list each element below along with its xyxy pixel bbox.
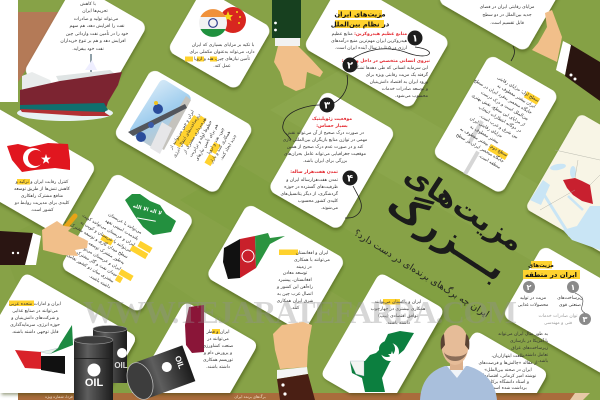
text: regional items: زیرساخت‌های عراق: [511, 346, 548, 351]
text: author credit: و استاد دانشگاه برکلی: [487, 378, 529, 385]
image: portrait of author: [420, 325, 497, 400]
text: pipeline card: جدید ایجاد کنند.: [218, 133, 238, 162]
text: Afghanistan: راه‌آهن این کشور و: [276, 284, 313, 290]
text: hydrocarbon: منابع عظیم هیدروکربن: منابع عظیم: [332, 31, 407, 37]
text: hydrocarbon: [331, 31, 408, 51]
text: Pakistan: ایران و پاکستان می‌توانند: [375, 299, 421, 305]
icon: oil barrel front: OIL: [85, 377, 103, 389]
map: Afghanistan flag: [223, 233, 285, 279]
text: geopolitics: مهمی در توازن منابع بازیگران بین‌المللی بازی: [283, 136, 368, 143]
text: geopolitics: بسیار حساس:: [316, 124, 348, 129]
text: civilisation: [280, 170, 339, 211]
icon: top right hand with sleeve: [532, 10, 600, 101]
text: Afghanistan: کنند.: [291, 305, 300, 311]
text: ship card: تحریم‌ها ایران: [82, 9, 109, 14]
text: human capital: نیروی انسانی متخصص در داخل و خارج:: [342, 59, 430, 64]
map: Saudi Arabia: [125, 194, 176, 235]
text: India China card: تأمین نیازهای چین، هند و اروپا: [194, 55, 251, 62]
text: two level advantages: [441, 66, 540, 175]
image: oil tanker: [17, 54, 122, 121]
icon: oil barrel back: [93, 326, 128, 383]
text: India China card: [185, 42, 255, 69]
text: Turkey: کلیدی برای مدیریت روابط دو: [14, 200, 70, 206]
text: intro: جدید بین‌الملل در دو سطح: [482, 13, 532, 18]
text: intro: مزایای رقابتی ایران در فضای: [480, 5, 535, 10]
text: Afghanistan: می‌توانند با همکاری: [294, 257, 331, 263]
text: geopolitics: بزرگی برای ایران باشد.: [303, 157, 347, 164]
text: Saudi: داشته باشند.: [88, 274, 111, 290]
text: two level advantages: بیشتر معطوف به: [469, 125, 499, 145]
marker: gray number 1: ۱: [571, 283, 575, 292]
text: Qatar: توریسم همکاری: [203, 357, 234, 363]
text: two level advantages: سطح دوم: بیشتر معطوف به: [459, 127, 508, 158]
text: hydrocarbon: ارزی در ۵ تا ۱۰ سال آینده ایران است.: [335, 45, 407, 51]
bottom brown strip: برگ‌های برنده ایران: [234, 394, 266, 399]
panel: Turkey card: [0, 98, 97, 235]
text: ship card: [60, 1, 128, 52]
text: human capital: گرفته یک مزیت رقابتی ویژه برای: [366, 71, 429, 78]
text: Qatar: می‌توانند در: [206, 337, 229, 342]
text: Qatar: ایران و قطر: [206, 330, 229, 335]
text: two level advantages: از مزایای این سطح، نقش بهتری: [471, 93, 526, 128]
text: human capital: [342, 59, 430, 99]
text: UAE: و شرکت‌های دانش‌بنیان و: [10, 315, 59, 321]
text: hydrocarbon: هیدروکربن ایران مهم‌ترین منبع درآمدهای: [331, 38, 408, 44]
text: regional items: مزیت در تولید: [520, 296, 547, 301]
text: Qatar: [203, 329, 234, 370]
icon: top centre hand with green sleeve: [272, 0, 323, 91]
text: Saudi: [46, 196, 153, 291]
panel: Qatar card: [132, 304, 256, 393]
text: Saudi: میدان نفت و گاز مشترک: [75, 249, 120, 278]
text: UAE: قابل توجهی داشته باشند.: [12, 330, 58, 335]
text: author credit: از مقاله «چالش‌ها و فرصت‌های: [478, 361, 538, 366]
text: ship card: نفت خود بیفزاید.: [72, 47, 104, 52]
panel: Pakistan card: [323, 275, 442, 393]
text: Saudi: می‌توانند با عربستان: [107, 212, 143, 236]
text: Turkey: [14, 179, 71, 213]
panel: pipeline card: [113, 68, 254, 195]
panel: two level advantages card: [432, 54, 559, 194]
text: pipeline card: خطوط لوله و ترانزیت: [189, 120, 214, 158]
text: regional items: به طور مثال ایران می‌تواند: [498, 332, 548, 337]
text: author credit: نوشته امیر کرمانی، اقتصاددان: [480, 373, 536, 379]
panel: top right intro card: [437, 0, 565, 52]
text: two level advantages: ایران بیشتر معطوف به: [496, 84, 536, 110]
icon: oil barrel lying: OIL: [173, 355, 186, 370]
text: UAE: می‌توانند در صنایع غذایی: [12, 309, 58, 314]
text: author credit: [478, 354, 538, 391]
marker: number 2: ۲: [347, 60, 353, 72]
text: two level advantages: منطقه است.: [477, 154, 502, 171]
marker: gray number 2: [523, 281, 535, 293]
text: India China card: با تکیه بر مزایای بسیاری که ایران: [192, 42, 254, 48]
text: human capital: محسوب می‌شود.: [395, 94, 429, 99]
text: Saudi: سطح میدان گازی و توسعه مشترک آن: [64, 218, 130, 260]
text: pipeline card: ایران و چین می‌توانند از: [169, 110, 196, 151]
image: pipeline workers: [128, 78, 193, 154]
text: two level advantages: مزایای رقابتی ایران: [469, 116, 503, 139]
heading: regional: مزیت‌های: [528, 263, 554, 269]
text: pipeline card: همکاری کنند و بازار: [208, 129, 232, 165]
text: ship card: با کاهش: [80, 1, 96, 7]
marker: gray number 3: ۳: [583, 315, 588, 324]
map: Qatar flag: [185, 305, 204, 353]
text: human capital: و توسعه صادرات خدمات: [382, 87, 428, 92]
text: two level advantages: بین شرق و غرب است.: [478, 114, 518, 140]
map: Iran region: [530, 150, 600, 250]
connector line behind cards: [511, 46, 514, 61]
text: author credit: ظلعت ایتهازاریان،: [491, 354, 525, 359]
text: Afghanistan: اتصال غرب چین به: [277, 292, 313, 297]
marker: number 3: [320, 98, 334, 112]
text: UAE: [9, 300, 61, 335]
marker: gray number 1: [567, 281, 579, 293]
text: intro: [480, 5, 535, 26]
heading: regional: ایران در منطقه: [525, 271, 577, 279]
text: geopolitics: موقعیت جغرافیایی می‌تواند عامل بحران‌های: [284, 152, 367, 157]
text: Saudi: می‌توانند با عربستان و کویت به: [79, 220, 133, 254]
text: civilisation: ظرفیت‌های گسترده در حوزه: [284, 183, 338, 190]
title: بـــزرگ: [380, 180, 516, 290]
marker: number 1: ۱: [412, 34, 418, 44]
panel: international heading card: [303, 0, 450, 109]
map: Turkey flag: [7, 143, 70, 172]
text: Pakistan: [371, 299, 426, 326]
text: Saudi: ایران و عربستان می‌توانند در توسعه: [61, 234, 122, 272]
panel: India China flags card: [167, 0, 272, 90]
text: regional items: زیرساخت‌های: [557, 296, 583, 301]
map: UAE: [15, 325, 73, 374]
text: two level advantages: در دوگانه انتظارات انتخاب: [477, 104, 523, 134]
marker: number 2: [342, 58, 358, 72]
text: Turkey: کشور است.: [31, 207, 54, 213]
heading: international: مزیت‌های ایران: [334, 10, 386, 18]
text: geopolitics: [283, 116, 368, 164]
text: Saudi: ایران و عربستان می‌توانند کویت: [81, 213, 136, 248]
text: regional items: با آمریکا در بازسازی: [510, 338, 548, 344]
text: regional items: محصولات غذایی: [518, 303, 549, 308]
text: two level advantages: سطح اول: مزایای رقابتی: [496, 76, 540, 104]
text: ship card: افزایش دهد و هم بر تنوع خریداران: [60, 39, 126, 44]
text: Pakistan: همکاری بیشتری در چهارچوب: [371, 306, 426, 312]
text: ship card: نفت را افزایش دهد، هم سهم: [69, 24, 125, 29]
text: India China card: عمل کند.: [213, 63, 231, 69]
subtitle: ایران چه برگ‌های برنده‌ای در دست دارد؟: [352, 228, 491, 320]
marker: number 1: [408, 30, 422, 46]
connector: gray curve: [575, 293, 585, 313]
text: ship card: می‌تواند تولید و صادرات: [74, 17, 119, 22]
text: Turkey: کاهش تنش‌ها از طریق توسعه: [14, 186, 71, 192]
marker: gray number 2: ۲: [527, 283, 532, 292]
connector curve joining numbers: [283, 47, 429, 218]
text: human capital: این سرمایه انسانی که طی دهه‌ها تشکیل: [352, 65, 428, 71]
icon: China flag circle: [220, 7, 246, 33]
text: civilisation: می‌شوند.: [321, 206, 339, 211]
text: two level advantages: جایگاه منحصر ایران در سطح: [455, 131, 506, 164]
text: Afghanistan: [276, 250, 331, 311]
bottom brown strip: [0, 393, 590, 400]
icon: left hand with pen: [0, 216, 88, 265]
text: UAE: ایران و امارات متحده عربی: [9, 302, 61, 307]
panel: UAE card: [0, 275, 135, 393]
text: Afghanistan: شرق ایران همکاری: [277, 298, 314, 304]
title: مزیت‌های: [399, 157, 530, 259]
bottom brown strip: نشریه تجارت فردا، شماره ویژه: [45, 394, 95, 399]
text: geopolitics: در صورت درک صحیح از آن می‌تواند نقش: [286, 130, 364, 136]
text: Qatar: صنعت کشاورزی: [203, 343, 234, 349]
text: Afghanistan: توسعه معادن: [283, 271, 308, 276]
panel: Saudi card: [46, 172, 195, 313]
text: two level advantages: جایگاه منحصر به‌فرد ایران در سطح: [473, 77, 534, 116]
text: Qatar: داشته باشند.: [206, 365, 230, 370]
text: ship card: خود را در تأمین نفت وارداتی چین: [66, 30, 128, 37]
text: Pakistan: توافق اقتصادی (پیپ): [378, 313, 419, 319]
heading: international: در نظام بین‌الملل: [331, 20, 390, 28]
text: Saudi: به‌طور مشترک توسعه دهند: [79, 236, 126, 266]
text: Afghanistan: ایران و افغانستان: [296, 251, 328, 256]
text: regional items: تعامل داشته: [525, 353, 549, 358]
text: intro: قابل تقسیم است.: [490, 21, 524, 26]
text: civilisation: گردشگری، از دیگر پتانسیل‌های: [280, 190, 339, 197]
panel: geopolitics and civilisation card: [268, 90, 396, 231]
text: civilisation: تمدن هفت‌هزار ساله:: [290, 170, 338, 175]
panel: Iran location map card: [525, 113, 600, 263]
marker: number 4: ۴: [347, 174, 353, 184]
marker: gray number 3: [579, 313, 591, 325]
icon: bottom hand with brown sleeve: [273, 322, 315, 400]
marker: number 4: [342, 170, 358, 186]
panel: ship card: [17, 0, 148, 121]
text: pipeline card: چین، هند و اروپا: [207, 127, 226, 155]
text: Afghanistan: افغانستان، پیشبرد: [278, 278, 312, 283]
text: pipeline card: هم برای تأمین نیازهای: [193, 122, 220, 162]
text: regional items: باشد.: [538, 359, 548, 364]
text: Pakistan: داشته باشند.: [386, 321, 410, 326]
text: author credit: برداشت شده است.: [489, 386, 527, 391]
text: regional items: صنعتی قوی: [559, 303, 581, 308]
text: Saudi: بلندمدت امنیتی تعهد: [104, 219, 139, 242]
text: two level advantages: بین‌الملل است و درک درست: [480, 90, 530, 122]
heading: regional: [523, 261, 580, 279]
text: Afghanistan: در زمینه: [296, 265, 312, 270]
text: geopolitics: کند و در صورت عدم درک صحیح از همین: [287, 144, 364, 150]
text: Turkey: کنترل رقابت ایران و ترکیه و: [15, 179, 69, 185]
text: pipeline card: زیرساخت‌های انتقال انرژی: [173, 113, 202, 159]
text: geopolitics: موقعیت ژئوپلیتیک: [312, 116, 352, 122]
marker: number 3: ۳: [324, 100, 330, 112]
text: human capital: ورود ایران به اقتصاد دانش‌بنیان: [370, 80, 428, 85]
text: civilisation: کلیدی کشور محسوب: [298, 198, 339, 204]
panel: author credit card: [439, 333, 546, 393]
text: civilisation: تمدن هفت‌هزارساله ایران و: [285, 178, 339, 183]
text: pipeline card: بهره‌برداری مشترک از: [181, 116, 208, 156]
text: regional items: توان صادرات خدمات: [538, 314, 578, 319]
panel: regional advantages card: [498, 245, 600, 376]
text: pipeline card: [166, 109, 238, 180]
panel: Afghanistan card: [206, 203, 346, 333]
map: Saudi Arabia: لا اله الا الله: [132, 203, 163, 217]
text: author credit: ایران در صحنه بین‌الملل»: [484, 368, 532, 373]
text: India China card: دارد، می‌تواند به‌عنوان مکملی برای: [189, 49, 255, 55]
watermark: WWW.TEJARATEFARDA.COM: [83, 294, 517, 330]
text: regional items: فنی و مهندسی: [544, 321, 572, 326]
map: Pakistan flag: [350, 331, 414, 392]
text: UAE: حوزه انرژی، سرمایه‌گذاری: [10, 321, 60, 328]
text: Saudi: بیشتری میان دو کشور تعامل: [66, 252, 115, 284]
heading: international: [331, 10, 390, 28]
text: Turkey: منافع مشترک راهکاری: [21, 193, 64, 199]
icon: oil barrel front: [74, 336, 113, 400]
text: regional items: [498, 296, 583, 364]
icon: oil barrel lying: [122, 345, 195, 400]
icon: India flag circle: [199, 9, 227, 37]
icon: oil barrel back: OIL: [114, 361, 128, 370]
text: Qatar: و پرورش دام و: [203, 351, 232, 356]
